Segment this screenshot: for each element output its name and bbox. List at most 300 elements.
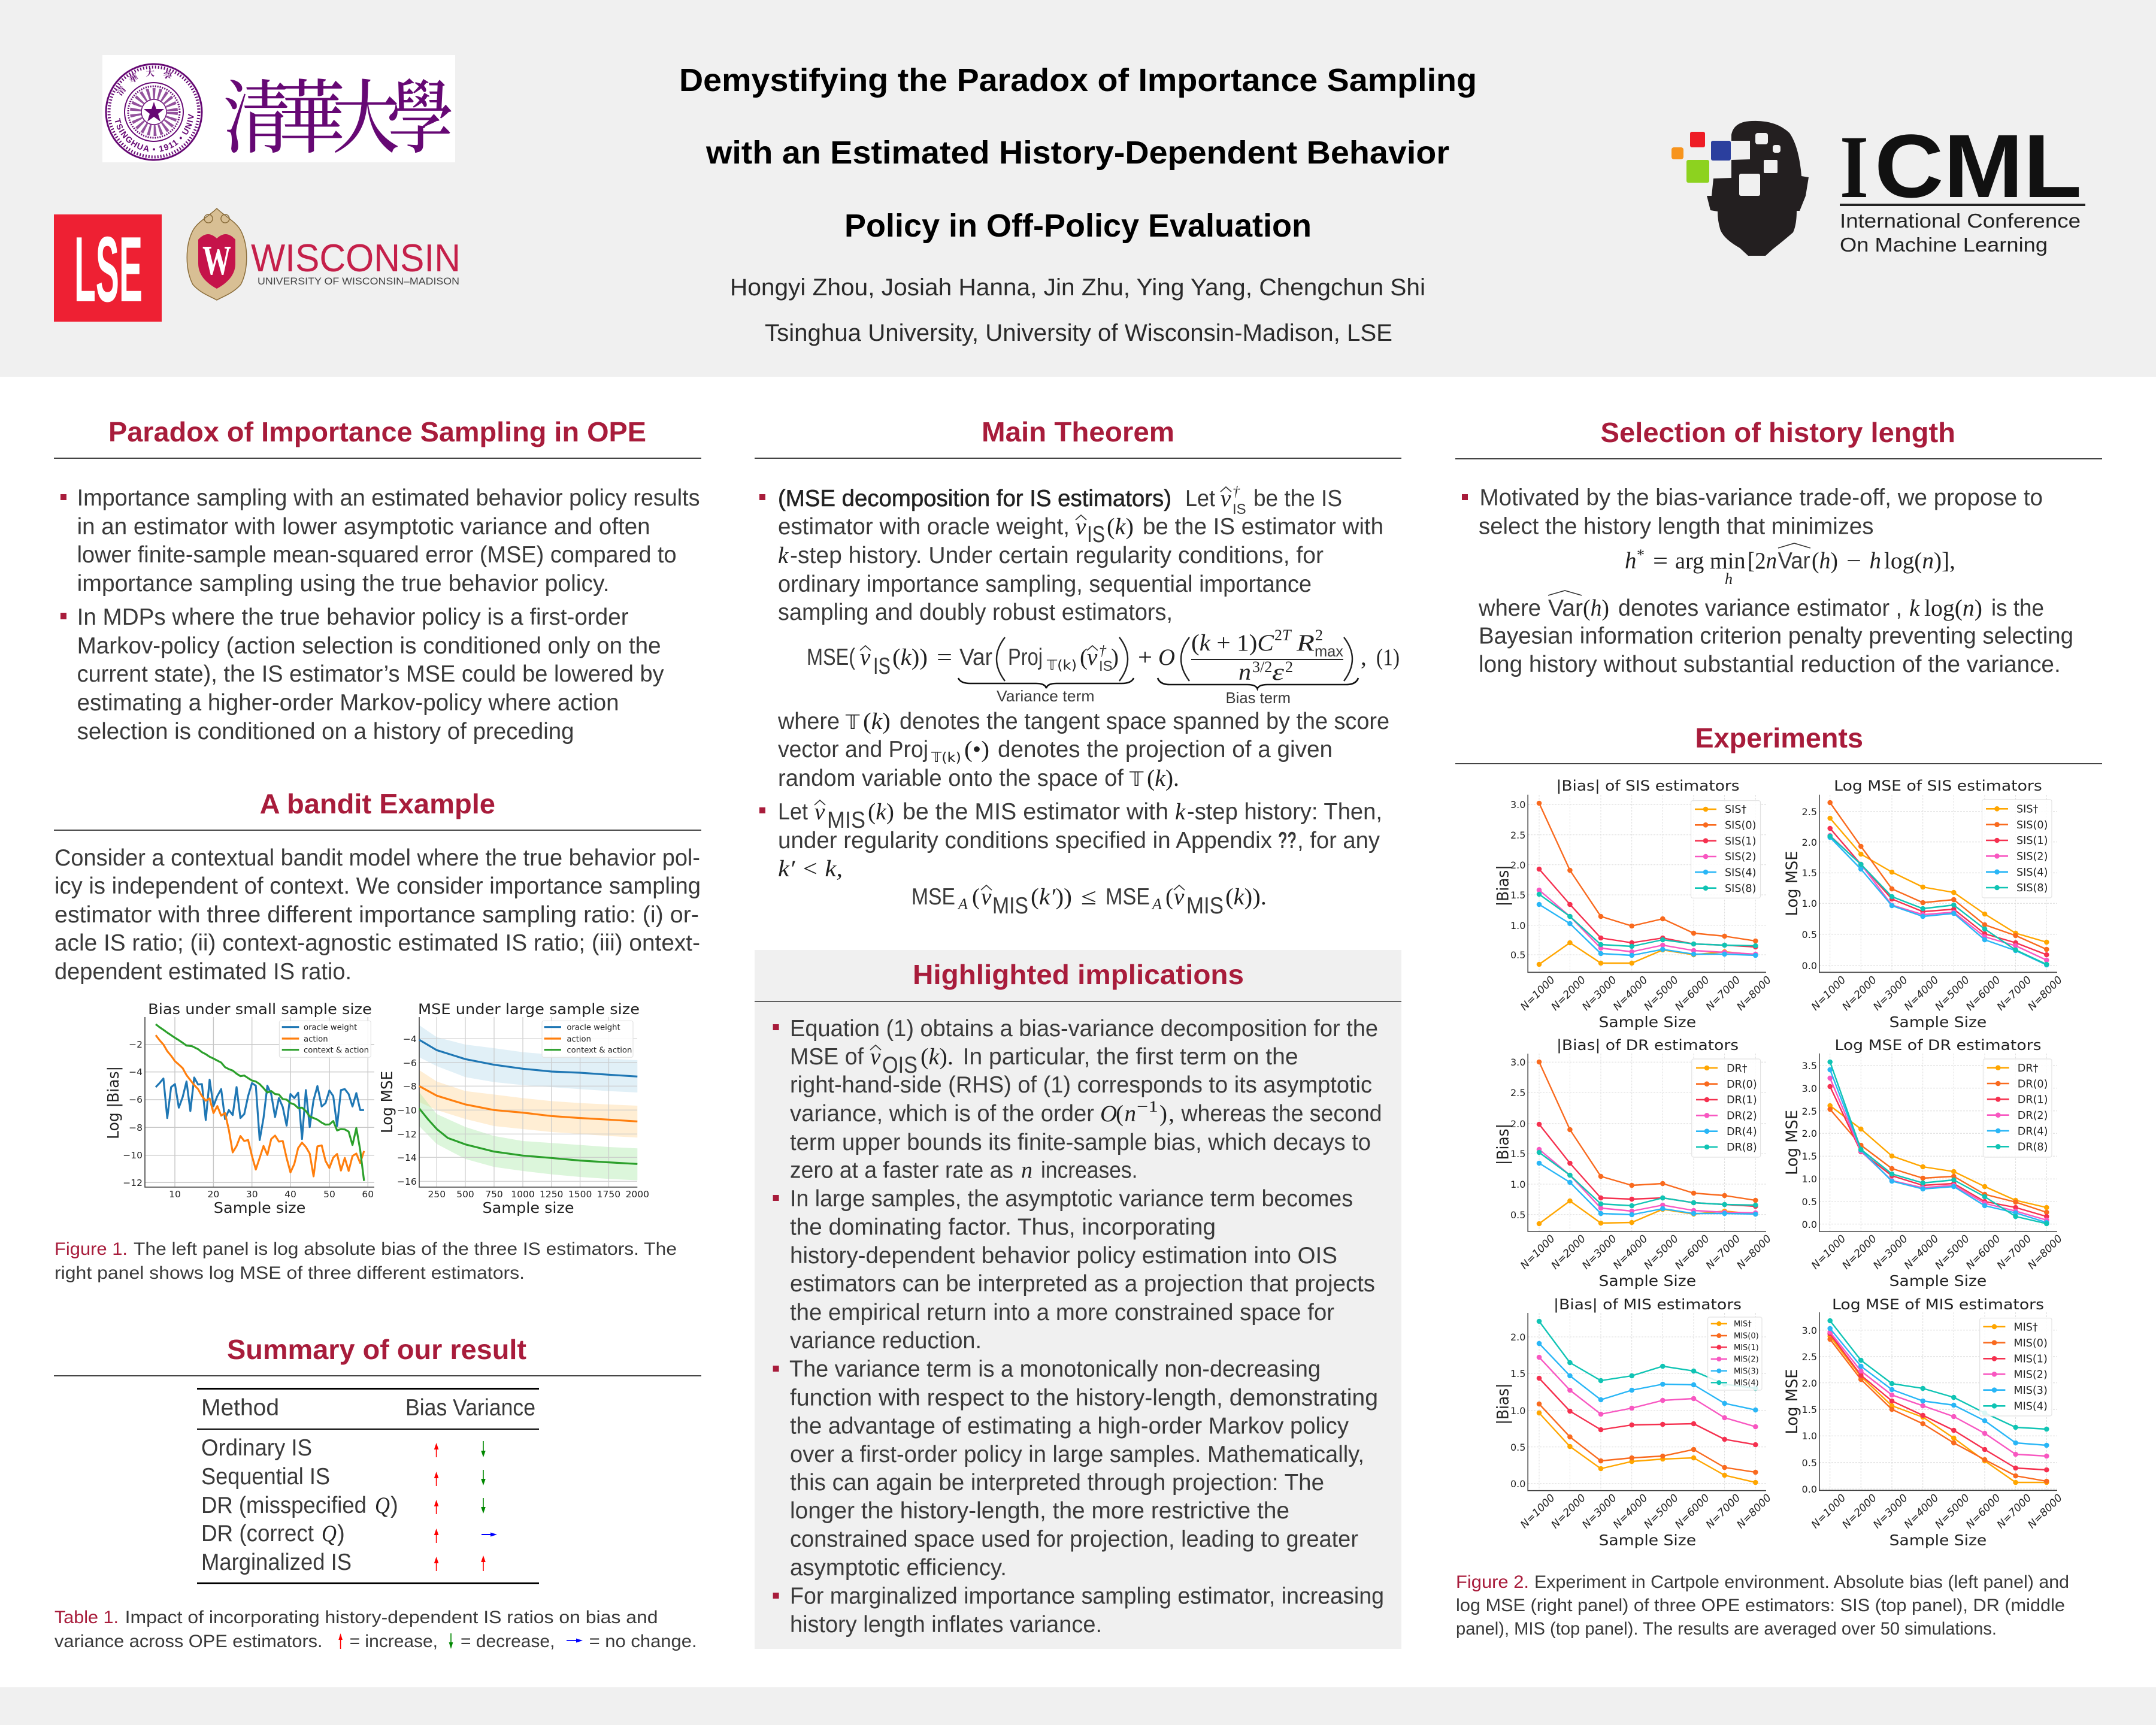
logo: Tsinghua University: 清華大學 xyxy=(115,68,172,96)
formula: MIS inequality: (k)). xyxy=(1225,884,1267,910)
logo: University of Wisconsin-Madison: W xyxy=(202,238,231,284)
formula: MSE decomposition equation: n xyxy=(1239,659,1251,685)
bullet: bias-variance decomposition: −1 xyxy=(1137,1098,1158,1115)
chart: bias of SIS estimators: N=8000 xyxy=(1735,974,1774,1013)
text: MSE decomposition: IS xyxy=(1233,501,1246,518)
bullet: large samples: the dominating factor. Thus, incorporating xyxy=(790,1215,1216,1240)
formula: MSE decomposition equation: † xyxy=(1099,643,1107,659)
chart: bias of SIS estimators: Sample Size xyxy=(1599,1013,1696,1031)
chart: bias of SIS estimators: 0.5 xyxy=(1510,949,1525,961)
table: impact on bias and variance: DR (correct xyxy=(201,1521,314,1547)
text: MIS estimator: MIS xyxy=(827,807,865,833)
chart: log MSE of SIS estimators: N=1000 xyxy=(1809,974,1848,1013)
chart: log MSE of DR estimators: 2.5 xyxy=(1802,1106,1817,1117)
chart: log MSE of MIS estimators: MIS(0) xyxy=(2013,1337,2048,1349)
table: impact on bias and variance: ) xyxy=(390,1493,398,1518)
chart: bias of MIS estimators xyxy=(1494,1296,1774,1549)
formula: history length selection: = xyxy=(1653,548,1668,574)
chart: bias of SIS estimators: N=3000 xyxy=(1580,974,1619,1013)
formula: history length selection: − xyxy=(1846,548,1861,574)
chart: bias of DR estimators: 1.5 xyxy=(1510,1148,1525,1160)
formula: MIS inequality: MSE xyxy=(1106,884,1150,910)
bullet: variance monotonic: The variance term is a monotonically non-decreasing xyxy=(789,1356,1321,1382)
chart: log MSE of MIS estimators: N=5000 xyxy=(1933,1492,1972,1531)
bullet: marginalized IS: For marginalized importance sampling estimator, increasing xyxy=(790,1584,1384,1609)
bullet text: paradox: In MDPs where the true behavior policy is a first-order xyxy=(77,604,629,630)
table: impact on bias and variance: Q xyxy=(375,1493,390,1518)
chart: log MSE of MIS estimators: 0.0 xyxy=(1802,1484,1817,1495)
formula: MSE decomposition equation: 𝕋(k) xyxy=(1046,658,1077,673)
paragraph: bandit model: estimator with three different importance sampling ratio: (i) or- xyxy=(54,902,699,928)
chart: log MSE of MIS estimators: N=8000 xyxy=(2026,1492,2065,1531)
chart: log MSE of SIS estimators: N=4000 xyxy=(1902,974,1941,1013)
bullet: marginalized IS xyxy=(773,1584,1384,1638)
chart: bias of MIS estimators: |Bias| xyxy=(1494,1384,1513,1424)
text: tangent space: (k). xyxy=(1147,765,1179,791)
heading: selection: Selection of history length xyxy=(1600,417,1955,448)
chart: log MSE of MIS estimators xyxy=(1783,1296,2065,1549)
text: selection explanation: Var xyxy=(1548,595,1583,621)
text: MIS estimator: k xyxy=(1175,799,1186,825)
chart: bias under small sample size: Sample size xyxy=(214,1199,305,1216)
text: MSE decomposition: sampling and doubly robust estimators, xyxy=(778,600,1173,625)
table: impact on bias and variance: Marginalized IS xyxy=(201,1550,352,1575)
chart: bias of MIS estimators: N=4000 xyxy=(1611,1492,1650,1531)
text: MSE decomposition: estimator with oracle weight, xyxy=(778,514,1070,540)
chart: bias of DR estimators: N=1000 xyxy=(1518,1233,1558,1272)
chart: bias of DR estimators: DR† xyxy=(1727,1063,1748,1075)
chart: log MSE of SIS estimators: 0.5 xyxy=(1802,929,1817,940)
footer band xyxy=(0,1687,2156,1725)
text: MSE decomposition: (k) xyxy=(1107,514,1134,540)
chart: bias of SIS estimators: N=6000 xyxy=(1673,974,1712,1013)
formula: MSE decomposition equation: Bias term xyxy=(1225,689,1291,707)
chart: bias of MIS estimators: Sample Size xyxy=(1599,1532,1696,1549)
chart: bias of SIS estimators: SIS(2) xyxy=(1725,851,1756,863)
text: MSE decomposition: † xyxy=(1233,484,1240,500)
bullet text: paradox xyxy=(60,485,700,745)
bullet: bias-variance decomposition: right-hand-side (RHS) of (1) corresponds to its asymptotic xyxy=(790,1072,1372,1098)
bullet: large samples xyxy=(773,1186,1375,1354)
formula: history length selection: h xyxy=(1625,548,1636,574)
chart: bias of DR estimators: DR(1) xyxy=(1727,1094,1757,1106)
chart: MSE under large sample size: −8 xyxy=(403,1081,417,1092)
chart: log MSE of DR estimators: N=6000 xyxy=(1964,1233,2003,1272)
chart: bias of SIS estimators: |Bias| of SIS estimators xyxy=(1556,777,1739,794)
heading: bandit: A bandit Example xyxy=(260,788,495,819)
bullet text: paradox: current state), the IS estimator’s MSE could be lowered by xyxy=(77,661,664,687)
chart: log MSE of MIS estimators: N=4000 xyxy=(1902,1492,1941,1531)
chart: log MSE of SIS estimators: 1.5 xyxy=(1802,867,1817,879)
affiliations: Tsinghua University, University of Wisconsin-Madison, LSE xyxy=(765,320,1392,346)
text: selection explanation: Bayesian information criterion penalty preventing selecting xyxy=(1479,623,2073,649)
chart: log MSE of SIS estimators: 1.0 xyxy=(1802,898,1817,909)
table: impact on bias and variance: Method xyxy=(201,1395,279,1421)
panel: main theorem xyxy=(755,416,1401,919)
chart: log MSE of MIS estimators: MIS(1) xyxy=(2013,1354,2048,1366)
chart: bias of DR estimators: N=8000 xyxy=(1735,1233,1774,1272)
text: MSE decomposition: k xyxy=(778,543,789,568)
formula: MSE decomposition equation: v xyxy=(860,644,871,670)
text: MIS estimator: -step history: Then, xyxy=(1187,799,1382,825)
chart: MSE under large sample size: 1250 xyxy=(540,1189,563,1200)
text: MSE decomposition: IS xyxy=(1087,522,1105,547)
formula: MIS inequality: v xyxy=(1174,884,1185,910)
formula: MSE decomposition equation: O xyxy=(1158,644,1175,670)
chart: log MSE of MIS estimators: Log MSE of MIS estimators xyxy=(1832,1296,2044,1313)
text: MIS estimator: ?? xyxy=(1278,828,1297,854)
chart: bias of DR estimators: DR(4) xyxy=(1727,1126,1757,1138)
chart: bias of SIS estimators: N=4000 xyxy=(1611,974,1650,1013)
formula: MIS inequality: A xyxy=(957,895,968,913)
chart: bias of DR estimators: N=2000 xyxy=(1549,1233,1588,1272)
formula: MIS inequality: (k′)) xyxy=(1031,884,1072,910)
chart: log MSE of DR estimators: N=3000 xyxy=(1871,1233,1910,1272)
chart: bias of DR estimators: 1.0 xyxy=(1510,1179,1525,1190)
chart: log MSE of DR estimators: 3.0 xyxy=(1802,1083,1817,1094)
chart: bias of MIS estimators: 0.5 xyxy=(1510,1442,1525,1453)
chart: bias of DR estimators: Sample Size xyxy=(1599,1272,1696,1290)
table: impact on bias and variance: DR (misspecified xyxy=(201,1493,367,1518)
chart: bias of DR estimators: N=4000 xyxy=(1611,1233,1650,1272)
chart: bias of MIS estimators: MIS(0) xyxy=(1734,1332,1759,1340)
logo: University of Wisconsin-Madison: UNIVERSITY OF WISCONSIN–MADISON xyxy=(258,276,459,287)
chart: bias of MIS estimators: MIS(4) xyxy=(1734,1379,1759,1388)
chart: bias of SIS estimators: SIS(8) xyxy=(1725,883,1756,895)
chart: bias of SIS estimators: N=1000 xyxy=(1518,974,1558,1013)
chart: log MSE of DR estimators: N=4000 xyxy=(1902,1233,1941,1272)
formula: MSE decomposition equation: Var xyxy=(959,644,992,670)
heading: experiments: Experiments xyxy=(1695,722,1863,753)
chart: bias of DR estimators: N=6000 xyxy=(1673,1233,1712,1272)
bullet: bias-variance decomposition: O xyxy=(1100,1101,1117,1127)
formula: MIS inequality: MSE xyxy=(912,884,955,910)
text: selection explanation xyxy=(1478,591,2073,677)
chart: bias of DR estimators: 0.5 xyxy=(1510,1209,1525,1221)
bullet: bias-variance decomposition: MSE of xyxy=(790,1044,864,1070)
caption: table 1: = decrease, xyxy=(461,1632,555,1651)
chart: log MSE of DR estimators: DR(8) xyxy=(2018,1142,2048,1154)
caption: figure 2: Figure 2. xyxy=(1456,1572,1529,1592)
chart: log MSE of MIS estimators: Log MSE xyxy=(1783,1369,1801,1434)
text: tangent space: random variable onto the space of xyxy=(778,765,1124,791)
chart: bias of DR estimators: |Bias| xyxy=(1494,1124,1513,1165)
bullet: large samples: the empirical return into a more constrained space for xyxy=(790,1300,1334,1325)
text: MIS estimator: k′ < k, xyxy=(778,856,843,882)
chart: log MSE of DR estimators: N=5000 xyxy=(1933,1233,1972,1272)
chart: bias under small sample size: context & action xyxy=(304,1046,369,1055)
text: MSE decomposition: be the IS estimator with xyxy=(1143,514,1383,540)
chart: bias of SIS estimators: SIS(1) xyxy=(1725,836,1756,848)
text: MSE decomposition: -step history. Under certain regularity conditions, for xyxy=(790,543,1324,568)
chart: log MSE of DR estimators: 1.0 xyxy=(1802,1173,1817,1185)
chart: log MSE of SIS estimators: SIS(1) xyxy=(2016,835,2048,847)
chart: bias under small sample size: −12 xyxy=(123,1178,143,1188)
formula: MSE decomposition equation: R xyxy=(1296,630,1315,656)
caption: figure 1 xyxy=(54,1239,677,1283)
logo: ICML: CML xyxy=(1875,116,2082,216)
formula: MSE decomposition equation: MSE( xyxy=(807,644,855,670)
chart: log MSE of DR estimators: N=7000 xyxy=(1995,1233,2034,1272)
chart: log MSE of MIS estimators: 0.5 xyxy=(1802,1457,1817,1469)
chart: bias of SIS estimators: N=2000 xyxy=(1549,974,1588,1013)
chart: bias of SIS estimators: SIS† xyxy=(1725,804,1747,816)
formula: MSE decomposition equation: v xyxy=(1087,644,1098,670)
chart: log MSE of MIS estimators: 3.0 xyxy=(1802,1325,1817,1336)
bullet: bias-variance decomposition: OIS xyxy=(882,1052,917,1078)
caption: table 1: = no change. xyxy=(589,1632,697,1651)
formula: MSE decomposition equation: (k + 1)C xyxy=(1191,630,1274,656)
chart: log MSE of MIS estimators: 2.5 xyxy=(1802,1351,1817,1363)
formula: history length selection: arg min xyxy=(1675,548,1746,574)
text: tangent space: denotes the projection of a given xyxy=(998,737,1333,762)
text: MIS estimator: , for any xyxy=(1297,828,1380,854)
formula: MSE decomposition equation: IS xyxy=(873,653,891,679)
chart: MSE under large sample size: Log MSE xyxy=(378,1071,396,1133)
formula: MSE decomposition equation: 2 xyxy=(1285,658,1293,676)
chart: bias under small sample size: −4 xyxy=(129,1067,143,1078)
bullet: variance monotonic: function with respect to the history-length, demonstrating xyxy=(790,1385,1378,1411)
logo: ICML: On Machine Learning xyxy=(1840,234,2048,256)
chart: log MSE of SIS estimators: N=3000 xyxy=(1871,974,1910,1013)
chart: bias of DR estimators: |Bias| of DR estimators xyxy=(1557,1037,1739,1054)
chart: log MSE of SIS estimators: 0.0 xyxy=(1802,960,1817,972)
chart: bias of DR estimators: DR(8) xyxy=(1727,1142,1757,1154)
panel: summary of our result xyxy=(54,1334,701,1651)
chart: bias of MIS estimators: N=2000 xyxy=(1549,1492,1588,1531)
formula: MSE decomposition equation: (1) xyxy=(1376,644,1400,670)
chart: log MSE of SIS estimators: SIS† xyxy=(2016,804,2039,816)
chart: log MSE of DR estimators: 0.0 xyxy=(1802,1219,1817,1230)
chart: bias of SIS estimators xyxy=(1494,777,1774,1031)
chart: MSE under large sample size: 1500 xyxy=(568,1189,592,1200)
formula: MSE decomposition equation: Variance term xyxy=(997,687,1095,705)
chart: bias under small sample size: action xyxy=(304,1035,328,1044)
chart: bias of DR estimators: 2.5 xyxy=(1510,1087,1525,1098)
formula: history length selection: [2n xyxy=(1748,548,1777,574)
formula: MSE decomposition equation: max xyxy=(1315,642,1343,660)
chart row: SIS estimators xyxy=(1494,777,2065,1031)
bullet: bias-variance decomposition: term upper bounds its finite-sample bias, which decays to xyxy=(790,1130,1371,1155)
chart: log MSE of DR estimators: N=2000 xyxy=(1840,1233,1879,1272)
chart: bias of MIS estimators: N=1000 xyxy=(1518,1492,1558,1531)
chart: log MSE of DR estimators: 1.5 xyxy=(1802,1151,1817,1162)
text: tangent space: 𝕋(k) xyxy=(931,750,961,765)
bullet: bias-variance decomposition: (k). xyxy=(920,1044,953,1070)
bullet: bias-variance decomposition: Equation (1) obtains a bias-variance decomposition for the xyxy=(790,1016,1378,1042)
chart: MSE under large sample size: MSE under large sample size xyxy=(418,1001,640,1018)
formula: MIS inequality: v xyxy=(981,884,992,910)
text: selection explanation: is the xyxy=(1991,595,2044,621)
bullet text: paradox: estimating a higher-order Markov-policy where action xyxy=(77,690,619,716)
formula: MIS inequality: MIS xyxy=(992,893,1028,919)
formula: MSE decomposition equation: ) xyxy=(1111,644,1119,670)
chart: bias of MIS estimators: 0.0 xyxy=(1510,1478,1525,1490)
paragraph: bandit model: Consider a contextual bandit model where the true behavior pol- xyxy=(54,845,700,871)
chart: bias under small sample size: Log |Bias| xyxy=(105,1066,123,1139)
caption: figure 1: Figure 1. xyxy=(54,1239,128,1259)
panel: experiments xyxy=(1455,722,2102,1639)
panel: selection of history length xyxy=(1455,417,2102,677)
formula: MSE decomposition equation: + xyxy=(1138,644,1152,670)
formula: MIS inequality: MIS xyxy=(1186,893,1224,919)
logo: ICML: International Conference xyxy=(1840,210,2081,232)
chart: bias of MIS estimators: N=3000 xyxy=(1580,1492,1619,1531)
chart: log MSE of MIS estimators: Sample Size xyxy=(1889,1532,1987,1549)
formula: MIS inequality: ( xyxy=(1165,884,1173,910)
text: MSE decomposition: ordinary importance sampling, sequential importance xyxy=(778,571,1312,597)
bullet: bias-variance decomposition: increases. xyxy=(1041,1157,1138,1184)
bullet: large samples: estimators can be interpreted as a projection that projects xyxy=(790,1271,1375,1297)
chart: log MSE of SIS estimators: Log MSE of SIS estimators xyxy=(1834,777,2042,794)
bullet text: paradox: Importance sampling with an estimated behavior policy results xyxy=(77,485,700,511)
chart: log MSE of MIS estimators: N=2000 xyxy=(1840,1492,1879,1531)
chart: log MSE of DR estimators: DR(4) xyxy=(2018,1126,2048,1138)
chart: log MSE of SIS estimators: Sample Size xyxy=(1889,1013,1987,1031)
formula: history length selection: Var xyxy=(1778,548,1810,574)
text: MSE decomposition: Let xyxy=(1185,486,1215,512)
table: impact on bias and variance: Q xyxy=(322,1521,337,1547)
chart: log MSE of MIS estimators: MIS(3) xyxy=(2013,1385,2048,1397)
bullet: bias-variance decomposition: v xyxy=(870,1044,881,1070)
chart: MSE under large sample size: −4 xyxy=(403,1034,417,1045)
chart: bias of DR estimators: 3.0 xyxy=(1510,1057,1525,1068)
caption: table 1: variance across OPE estimators. xyxy=(54,1632,323,1651)
text: tangent space xyxy=(777,709,1389,791)
chart: log MSE of DR estimators: 2.0 xyxy=(1802,1128,1817,1139)
chart: bias of SIS estimators: |Bias| xyxy=(1494,865,1513,906)
chart: bias under small sample size: 50 xyxy=(323,1189,335,1200)
text: tangent space: vector and Proj xyxy=(778,737,928,762)
chart row: MIS estimators xyxy=(1494,1296,2065,1549)
bullet text: paradox: importance sampling using the true behavior policy. xyxy=(77,571,610,597)
formula: MSE decomposition equation: IS xyxy=(1099,658,1113,674)
chart: log MSE of DR estimators: DR(1) xyxy=(2018,1094,2048,1106)
chart: bias of MIS estimators: MIS(3) xyxy=(1734,1367,1759,1376)
chart: MSE under large sample size: 1000 xyxy=(511,1189,535,1200)
chart: bias of SIS estimators: 1.0 xyxy=(1510,920,1525,931)
chart: log MSE of MIS estimators: N=3000 xyxy=(1871,1492,1910,1531)
bullet: variance monotonic: asymptotic efficiency. xyxy=(790,1555,1007,1581)
chart: bias of MIS estimators: 2.0 xyxy=(1510,1331,1525,1343)
formula: MSE decomposition equation: ( xyxy=(1080,644,1088,670)
bullet: large samples: In large samples, the asymptotic variance term becomes xyxy=(790,1186,1353,1212)
bullet: marginalized IS: history length inflates variance. xyxy=(790,1612,1102,1638)
table: impact on bias and variance xyxy=(197,1388,539,1584)
text: tangent space: denotes the tangent space spanned by the score xyxy=(900,709,1389,734)
text: tangent space: 𝕋 xyxy=(845,710,860,734)
text: selection explanation: log(n) xyxy=(1924,595,1982,621)
text: selection intro: select the history length that minimizes xyxy=(1479,514,1873,539)
bullet: bias-variance decomposition: n xyxy=(1021,1157,1032,1184)
chart: log MSE of DR estimators: Log MSE of DR estimators xyxy=(1835,1037,2041,1054)
formula: MSE decomposition equation xyxy=(807,627,1400,707)
chart: bias under small sample size: −2 xyxy=(129,1039,143,1050)
chart: MSE under large sample size: Sample size xyxy=(483,1199,574,1216)
chart: log MSE of DR estimators: 3.5 xyxy=(1802,1060,1817,1072)
bullet: bias-variance decomposition: variance, which is of the order xyxy=(790,1101,1094,1127)
bullet: large samples: variance reduction. xyxy=(790,1328,982,1354)
chart: log MSE of MIS estimators: MIS(2) xyxy=(2013,1369,2048,1381)
chart: bias of SIS estimators: SIS(4) xyxy=(1725,867,1756,879)
heading: paradox: Paradox of Importance Sampling in OPE xyxy=(108,416,646,447)
formula: MSE decomposition equation: , xyxy=(1361,644,1367,670)
chart: MSE under large sample size: 250 xyxy=(428,1189,446,1200)
text: selection intro: Motivated by the bias-variance trade-off, we propose to xyxy=(1479,485,2043,510)
bullet: variance monotonic: constrained space used for projection, leading to greater xyxy=(790,1526,1358,1552)
formula: history length selection: h xyxy=(1870,548,1881,574)
chart: bias of SIS estimators: N=7000 xyxy=(1704,974,1743,1013)
bullet: bias-variance decomposition: whereas the second xyxy=(1181,1101,1382,1127)
formula: MSE decomposition equation: 2T xyxy=(1274,627,1292,644)
formula: MSE decomposition equation: ε xyxy=(1272,659,1285,685)
chart: bias of SIS estimators: SIS(0) xyxy=(1725,819,1756,831)
formula: MIS inequality xyxy=(912,884,1267,919)
caption: figure 1: right panel shows log MSE of three different estimators. xyxy=(54,1263,525,1283)
heading: main theorem: Main Theorem xyxy=(982,416,1174,447)
chart: MSE under large sample size: 750 xyxy=(485,1189,503,1200)
bullet: bias-variance decomposition xyxy=(773,1016,1382,1184)
paragraph: bandit model xyxy=(54,845,701,985)
chart: bias of SIS estimators: N=5000 xyxy=(1642,974,1681,1013)
text: selection explanation: long history without substantial reduction of the variance. xyxy=(1479,652,2061,677)
bullet: bias-variance decomposition: zero at a faster rate as xyxy=(790,1157,1013,1184)
text: tangent space: 𝕋 xyxy=(1129,767,1144,791)
chart: log MSE of SIS estimators: SIS(0) xyxy=(2016,819,2048,831)
chart: log MSE of DR estimators: DR† xyxy=(2018,1063,2039,1075)
caption: figure 2: Experiment in Cartpole environment. Absolute bias (left panel) and xyxy=(1534,1572,2069,1592)
heading: summary: Summary of our result xyxy=(227,1334,526,1365)
bullet: variance monotonic: over a first-order policy in large samples. Mathematically, xyxy=(790,1442,1364,1467)
bullet: bias-variance decomposition: In particular, the first term on the xyxy=(963,1044,1298,1070)
formula: MSE decomposition equation: 2 xyxy=(1315,627,1323,644)
caption: figure 2: panel), MIS (top panel). The results are averaged over 50 simulations. xyxy=(1456,1619,1997,1639)
logo: ICML: I xyxy=(1840,117,1869,217)
chart: bias under small sample size: 30 xyxy=(246,1189,258,1200)
text: selection explanation: k xyxy=(1909,595,1920,621)
text: MIS estimator: (k) xyxy=(868,799,894,825)
chart: bias of MIS estimators: 1.0 xyxy=(1510,1405,1525,1417)
chart: log MSE of DR estimators: N=8000 xyxy=(2026,1233,2065,1272)
logo: Tsinghua University: 清華大學 xyxy=(223,55,454,170)
table: impact on bias and variance: Bias Variance xyxy=(405,1395,535,1421)
chart: MSE under large sample size: −16 xyxy=(397,1176,417,1187)
chart: log MSE of SIS estimators xyxy=(1783,777,2065,1031)
formula: MSE decomposition equation: 3/2 xyxy=(1252,658,1272,676)
chart: log MSE of DR estimators: 0.5 xyxy=(1802,1196,1817,1208)
chart: log MSE of SIS estimators: N=6000 xyxy=(1964,974,2003,1013)
text: MSE decomposition: (MSE decomposition for IS estimators) xyxy=(778,486,1171,512)
chart: bias of DR estimators: DR(2) xyxy=(1727,1110,1757,1122)
bullet text: paradox: Markov-policy (action selection is conditioned only on the xyxy=(77,633,661,659)
chart: bias of MIS estimators: N=7000 xyxy=(1704,1492,1743,1531)
chart: log MSE of MIS estimators: 1.5 xyxy=(1802,1404,1817,1415)
chart: MSE under large sample size: context & action xyxy=(567,1046,632,1055)
chart: log MSE of DR estimators: DR(2) xyxy=(2018,1110,2048,1122)
caption: figure 2: log MSE (right panel) of three OPE estimators: SIS (top panel), DR (middle xyxy=(1456,1596,2065,1615)
header band xyxy=(0,0,2156,377)
text: MSE decomposition xyxy=(759,484,1383,625)
chart: bias of SIS estimators: 2.5 xyxy=(1510,830,1525,841)
chart: bias under small sample size: Bias under small sample size xyxy=(148,1001,372,1018)
text: tangent space: (k) xyxy=(863,709,891,734)
text: MSE decomposition: v xyxy=(1221,486,1231,512)
chart: bias under small sample size: −6 xyxy=(129,1094,143,1105)
title xyxy=(679,62,1477,244)
chart: bias of MIS estimators: N=6000 xyxy=(1673,1492,1712,1531)
text: tangent space: where xyxy=(777,709,840,734)
chart: log MSE of DR estimators: N=1000 xyxy=(1809,1233,1848,1272)
